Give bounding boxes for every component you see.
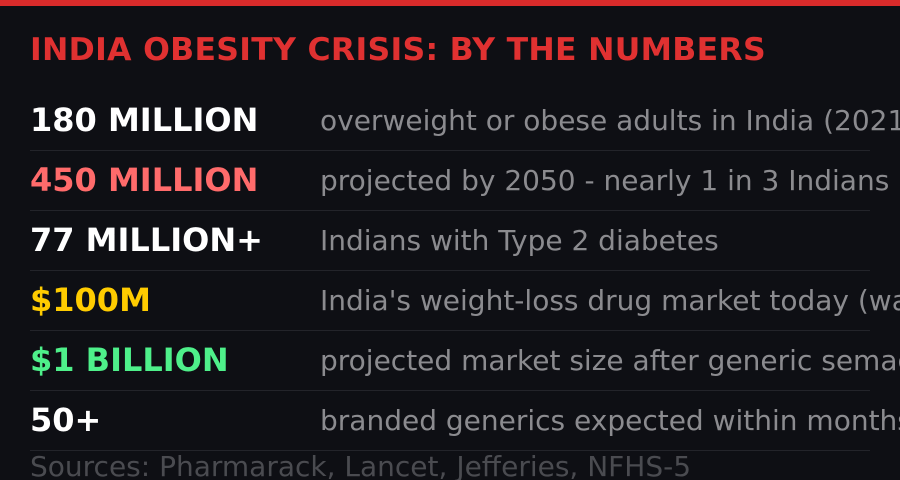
row: $1 billion [30,330,870,391]
value: $100M [30,281,151,319]
row: 50+ [30,390,870,451]
value: $1 BILLION [30,341,229,379]
row: 450 million [30,150,870,211]
title: INDIA OBESITY CRISIS: BY THE NUMBERS [30,32,766,68]
value: 180 MILLION [30,101,258,139]
description: branded generics expected within months [320,404,900,437]
value: 77 MILLION+ [30,221,263,259]
value: 50+ [30,401,101,439]
value: 450 MILLION [30,161,258,199]
description: Indians with Type 2 diabetes [320,224,719,257]
top accent bar [0,0,900,6]
description: projected by 2050 - nearly 1 in 3 Indians [320,164,889,197]
row: 77 million [30,210,870,271]
row: 180 million [30,90,870,151]
description: overweight or obese adults in India (2021) [320,104,900,137]
row: $100M [30,270,870,331]
